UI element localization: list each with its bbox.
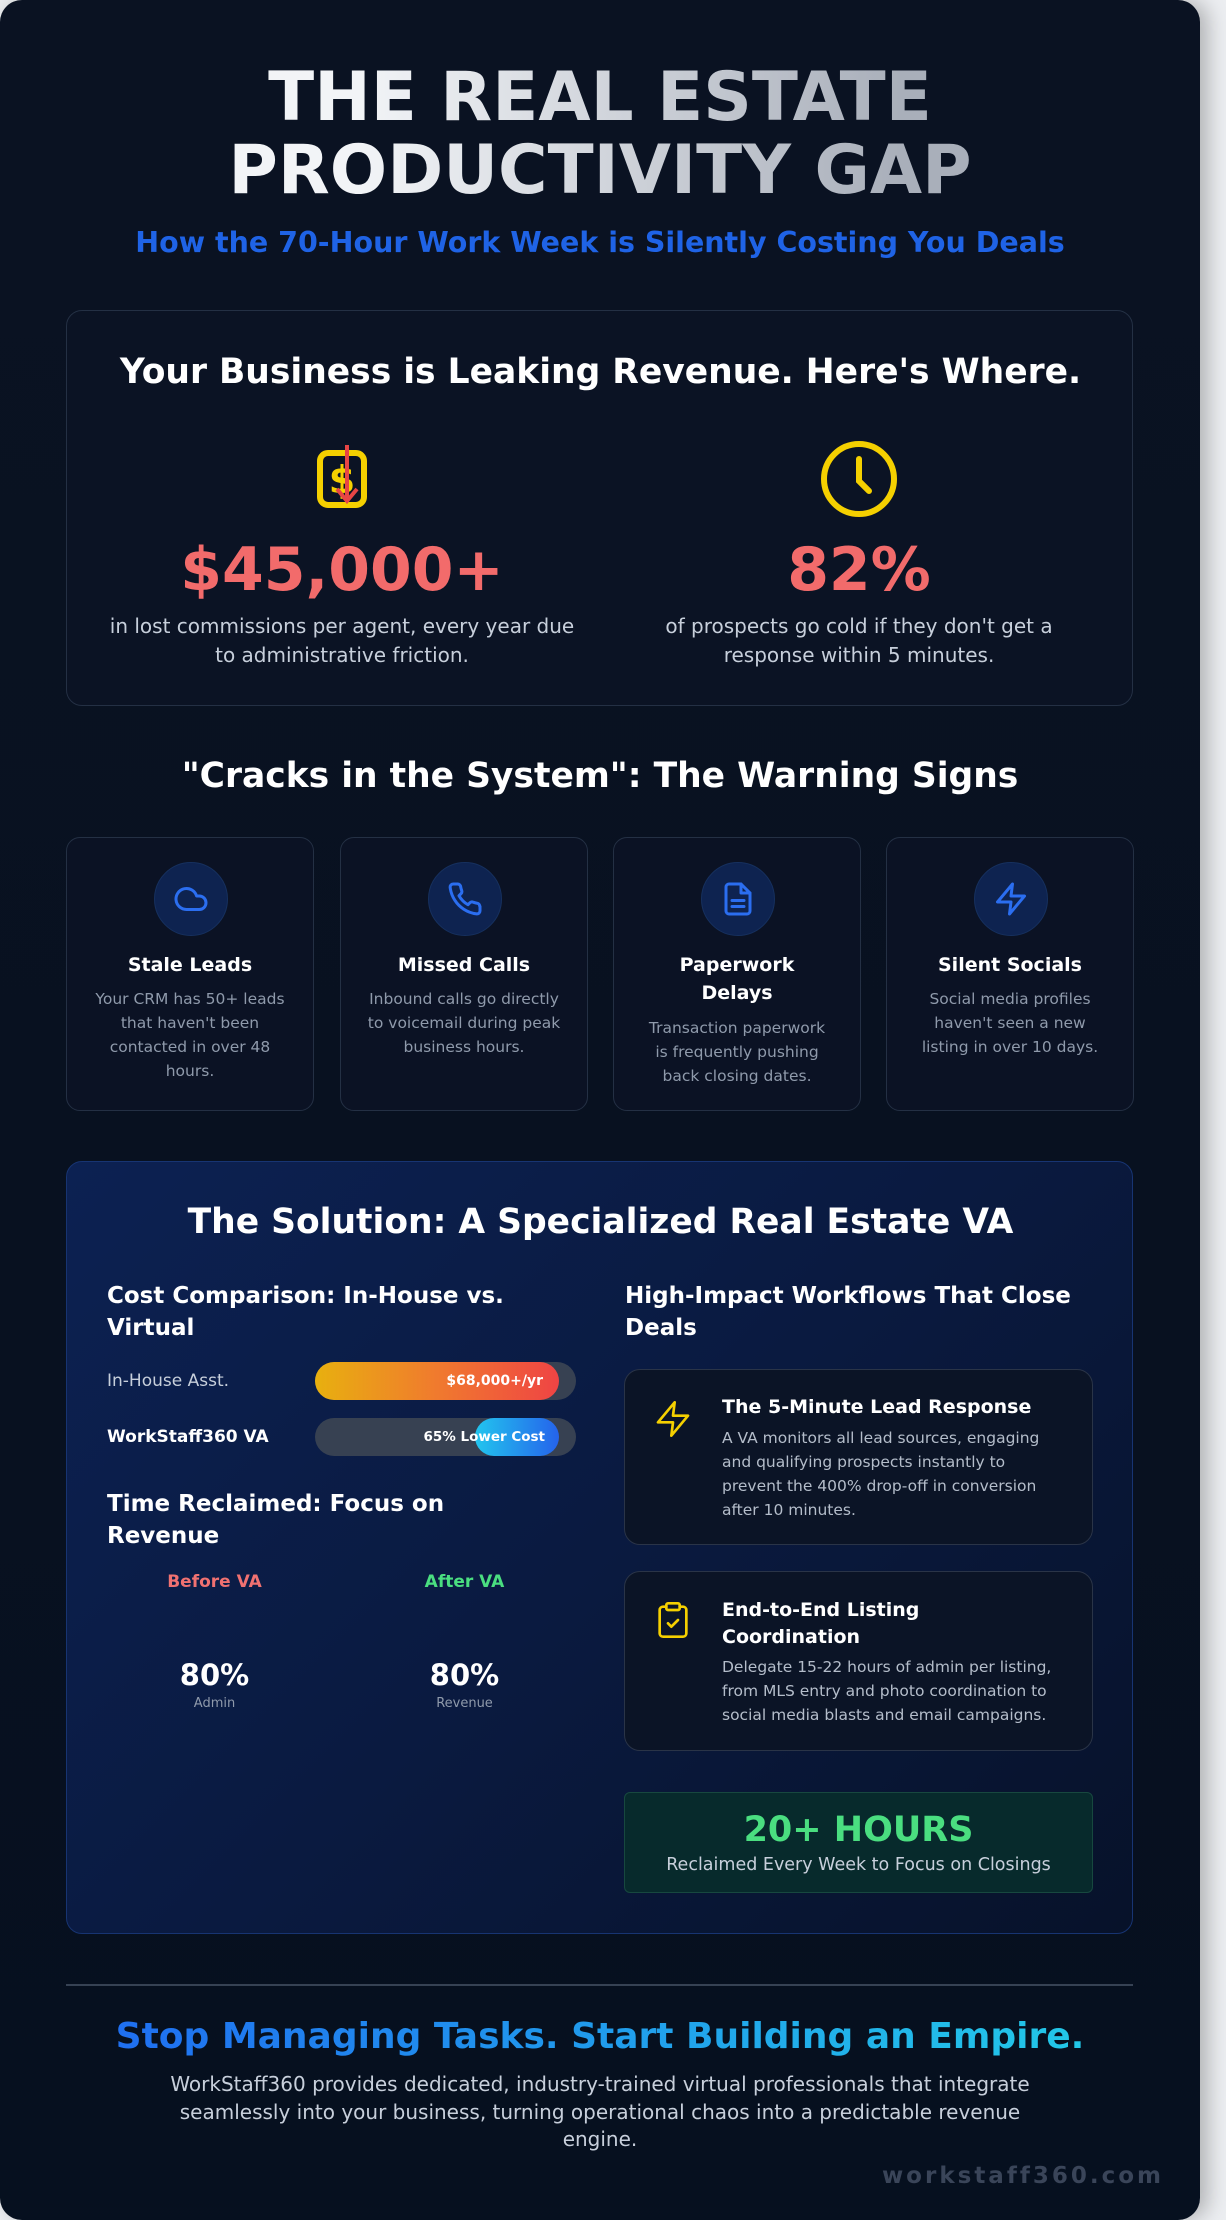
bar: workstaff360 va: WorkStaff360 VA	[107, 1427, 269, 1447]
stat: prospects go cold: response within 5 minutes.	[724, 643, 994, 667]
stat: prospects go cold: of prospects go cold if they don't get a	[665, 614, 1053, 638]
heading: cost comparison: Virtual	[107, 1315, 194, 1341]
callout: 20+ hours	[624, 1792, 1093, 1893]
card: paperwork delays: Transaction paperwork is frequently pushing back closing dates.	[649, 1019, 825, 1085]
heading: workflows	[625, 1283, 1071, 1341]
icon: dollar down	[317, 445, 367, 508]
heading: cost comparison	[107, 1283, 504, 1341]
heading: leaking revenue: Your Business is Leaking Revenue. Here's Where.	[120, 352, 1081, 392]
heading: solution: The Solution: A Specialized Real Estate VA	[188, 1202, 1013, 1242]
time before/after: After VA	[425, 1572, 504, 1592]
stat: prospects go cold	[665, 535, 1053, 667]
cta text: WorkStaff360 provides dedicated, industry-trained virtual professionals that integrate seamlessly into your business, turning operational chaos into a predictable revenue engine.	[170, 2072, 1030, 2151]
icon: cloud	[154, 862, 228, 936]
heading: workflows: Deals	[625, 1315, 697, 1341]
icon: document	[701, 862, 775, 936]
workflow: listing coordination: Delegate 15-22 hours of admin per listing, from MLS entry and photo coordination to social media blasts and email campaigns.	[722, 1658, 1051, 1724]
card: paperwork delays	[613, 837, 861, 1111]
panel: revenue leaks	[66, 310, 1133, 706]
time before/after: Revenue	[436, 1696, 493, 1711]
time before/after	[167, 1572, 504, 1711]
icon: bolt	[974, 862, 1048, 936]
subtitle: How the 70-Hour Work Week is Silently Costing You Deals	[135, 226, 1065, 259]
time before/after: 80%	[180, 1658, 249, 1692]
heading: time reclaimed: Revenue	[107, 1523, 219, 1549]
bar: in-house: In-House Asst.	[107, 1371, 229, 1391]
time before/after: 80%	[430, 1658, 499, 1692]
icon: clock	[821, 441, 897, 517]
icon: dollar down: $	[329, 458, 355, 502]
stat: lost commissions: to administrative friction.	[215, 643, 469, 667]
card: silent socials	[886, 837, 1134, 1111]
card: missed calls	[340, 837, 588, 1111]
card: missed calls: Missed Calls	[398, 954, 530, 976]
workflow: listing coordination	[624, 1571, 1093, 1751]
stat: lost commissions: in lost commissions per agent, every year due	[110, 614, 574, 638]
time before/after: Admin	[194, 1696, 235, 1711]
card: silent socials: Social media profiles haven't seen a new listing in over 10 days.	[922, 990, 1098, 1056]
stat: prospects go cold: 82%	[787, 535, 931, 605]
card: paperwork delays: Delays	[701, 982, 773, 1004]
bar: workstaff360 va: 65% Lower Cost	[423, 1429, 545, 1445]
heading: warning signs: "Cracks in the System": The Warning Signs	[182, 756, 1018, 796]
panel: solution	[66, 1161, 1133, 1934]
cta heading: Stop Managing Tasks. Start Building an Empire.	[116, 2016, 1084, 2057]
card: stale leads	[66, 837, 314, 1111]
icon: clipboard	[658, 1602, 688, 1638]
bar: in-house	[107, 1362, 576, 1400]
card: stale leads: Your CRM has 50+ leads that haven't been contacted in over 48 hours.	[95, 990, 285, 1080]
card: paperwork delays: Paperwork	[680, 954, 794, 976]
callout: 20+ hours: 20+ HOURS	[744, 1810, 973, 1850]
workflow: lead response: A VA monitors all lead sources, engaging and qualifying prospects instantly to prevent the 400% drop-off in conversion after 10 minutes.	[722, 1429, 1039, 1519]
icon: phone	[428, 862, 502, 936]
bar: workstaff360 va	[107, 1418, 576, 1456]
workflow: listing coordination: End-to-End Listing	[722, 1599, 919, 1621]
heading: time reclaimed	[107, 1491, 444, 1549]
workflow: lead response	[624, 1369, 1093, 1545]
heading: workflows: High-Impact Workflows That Close	[625, 1283, 1071, 1309]
title	[0, 60, 1200, 206]
card: silent socials: Silent Socials	[938, 954, 1082, 976]
heading: cost comparison: Cost Comparison: In-House vs.	[107, 1283, 504, 1309]
title: THE REAL ESTATE	[268, 57, 932, 136]
heading: time reclaimed: Time Reclaimed: Focus on	[107, 1491, 444, 1517]
footer url: workstaff360.com	[882, 2163, 1164, 2189]
stat: lost commissions: $45,000+	[180, 535, 504, 605]
card: stale leads: Stale Leads	[128, 954, 252, 976]
bar: in-house: $68,000+/yr	[446, 1373, 543, 1389]
icon: bolt	[656, 1401, 690, 1437]
title: PRODUCTIVITY GAP	[228, 130, 972, 209]
card: missed calls: Inbound calls go directly to voicemail during peak business hours.	[368, 990, 560, 1056]
workflow: listing coordination: Coordination	[722, 1626, 860, 1648]
workflow: lead response: The 5-Minute Lead Response	[722, 1396, 1031, 1418]
callout: 20+ hours: Reclaimed Every Week to Focus on Closings	[666, 1855, 1051, 1875]
time before/after: Before VA	[167, 1572, 262, 1592]
stat: lost commissions	[110, 535, 574, 667]
